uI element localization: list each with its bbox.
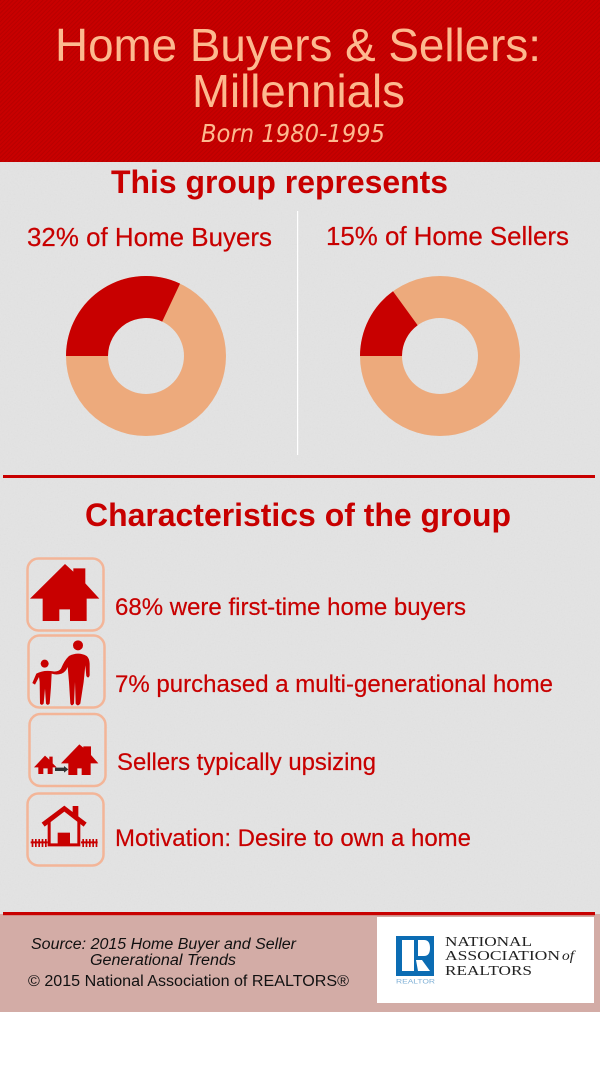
heading: this group represents: This group represents [111, 164, 448, 200]
icon: house with fence [28, 794, 104, 866]
title [55, 19, 541, 117]
text: Motivation: Desire to own a home [115, 825, 471, 852]
icon: adult and child [28, 636, 104, 708]
copyright: © 2015 National Association of REALTORS® [28, 973, 350, 990]
donut chart: buyers [66, 276, 226, 436]
icon: house [28, 558, 104, 630]
label: 32% of home buyers: 32% of Home Buyers [27, 222, 272, 252]
characteristic: upsizing [30, 714, 376, 786]
text: 68% were first-time home buyers [115, 594, 466, 621]
logo: National Association of Realtors: of [562, 949, 576, 964]
source note: Source: 2015 Home Buyer and Seller [31, 936, 297, 953]
logo: National Association of Realtors: REALTORS [445, 964, 532, 979]
panel: home buyers [27, 222, 272, 436]
text: Sellers typically upsizing [117, 749, 376, 776]
panel: home sellers [326, 221, 569, 436]
source note [31, 936, 297, 969]
source note: Generational Trends [90, 952, 236, 969]
characteristic: first-time buyers [28, 558, 466, 630]
label: 15% of home sellers: 15% of Home Sellers [326, 221, 569, 251]
characteristic: multi-generational [28, 636, 553, 708]
text: 7% purchased a multi-generational home [115, 671, 553, 698]
subtitle: Born 1980-1995 [201, 119, 385, 148]
characteristic: motivation [28, 794, 471, 866]
donut chart: sellers [360, 276, 520, 436]
logo: National Association of Realtors: REALTOR [396, 978, 435, 986]
title: Home Buyers & Sellers: [55, 19, 541, 71]
heading: characteristics of the group: Characteristics of the group [85, 497, 511, 533]
logo: National Association of Realtors: ASSOCIATION [445, 949, 560, 964]
logo: National Association of Realtors [377, 917, 594, 1003]
header banner [0, 0, 600, 162]
logo: National Association of Realtors: NATIONAL [445, 935, 532, 950]
icon: small house to large house [30, 714, 106, 786]
title: Millennials [192, 65, 405, 117]
footer panel [0, 912, 600, 1012]
